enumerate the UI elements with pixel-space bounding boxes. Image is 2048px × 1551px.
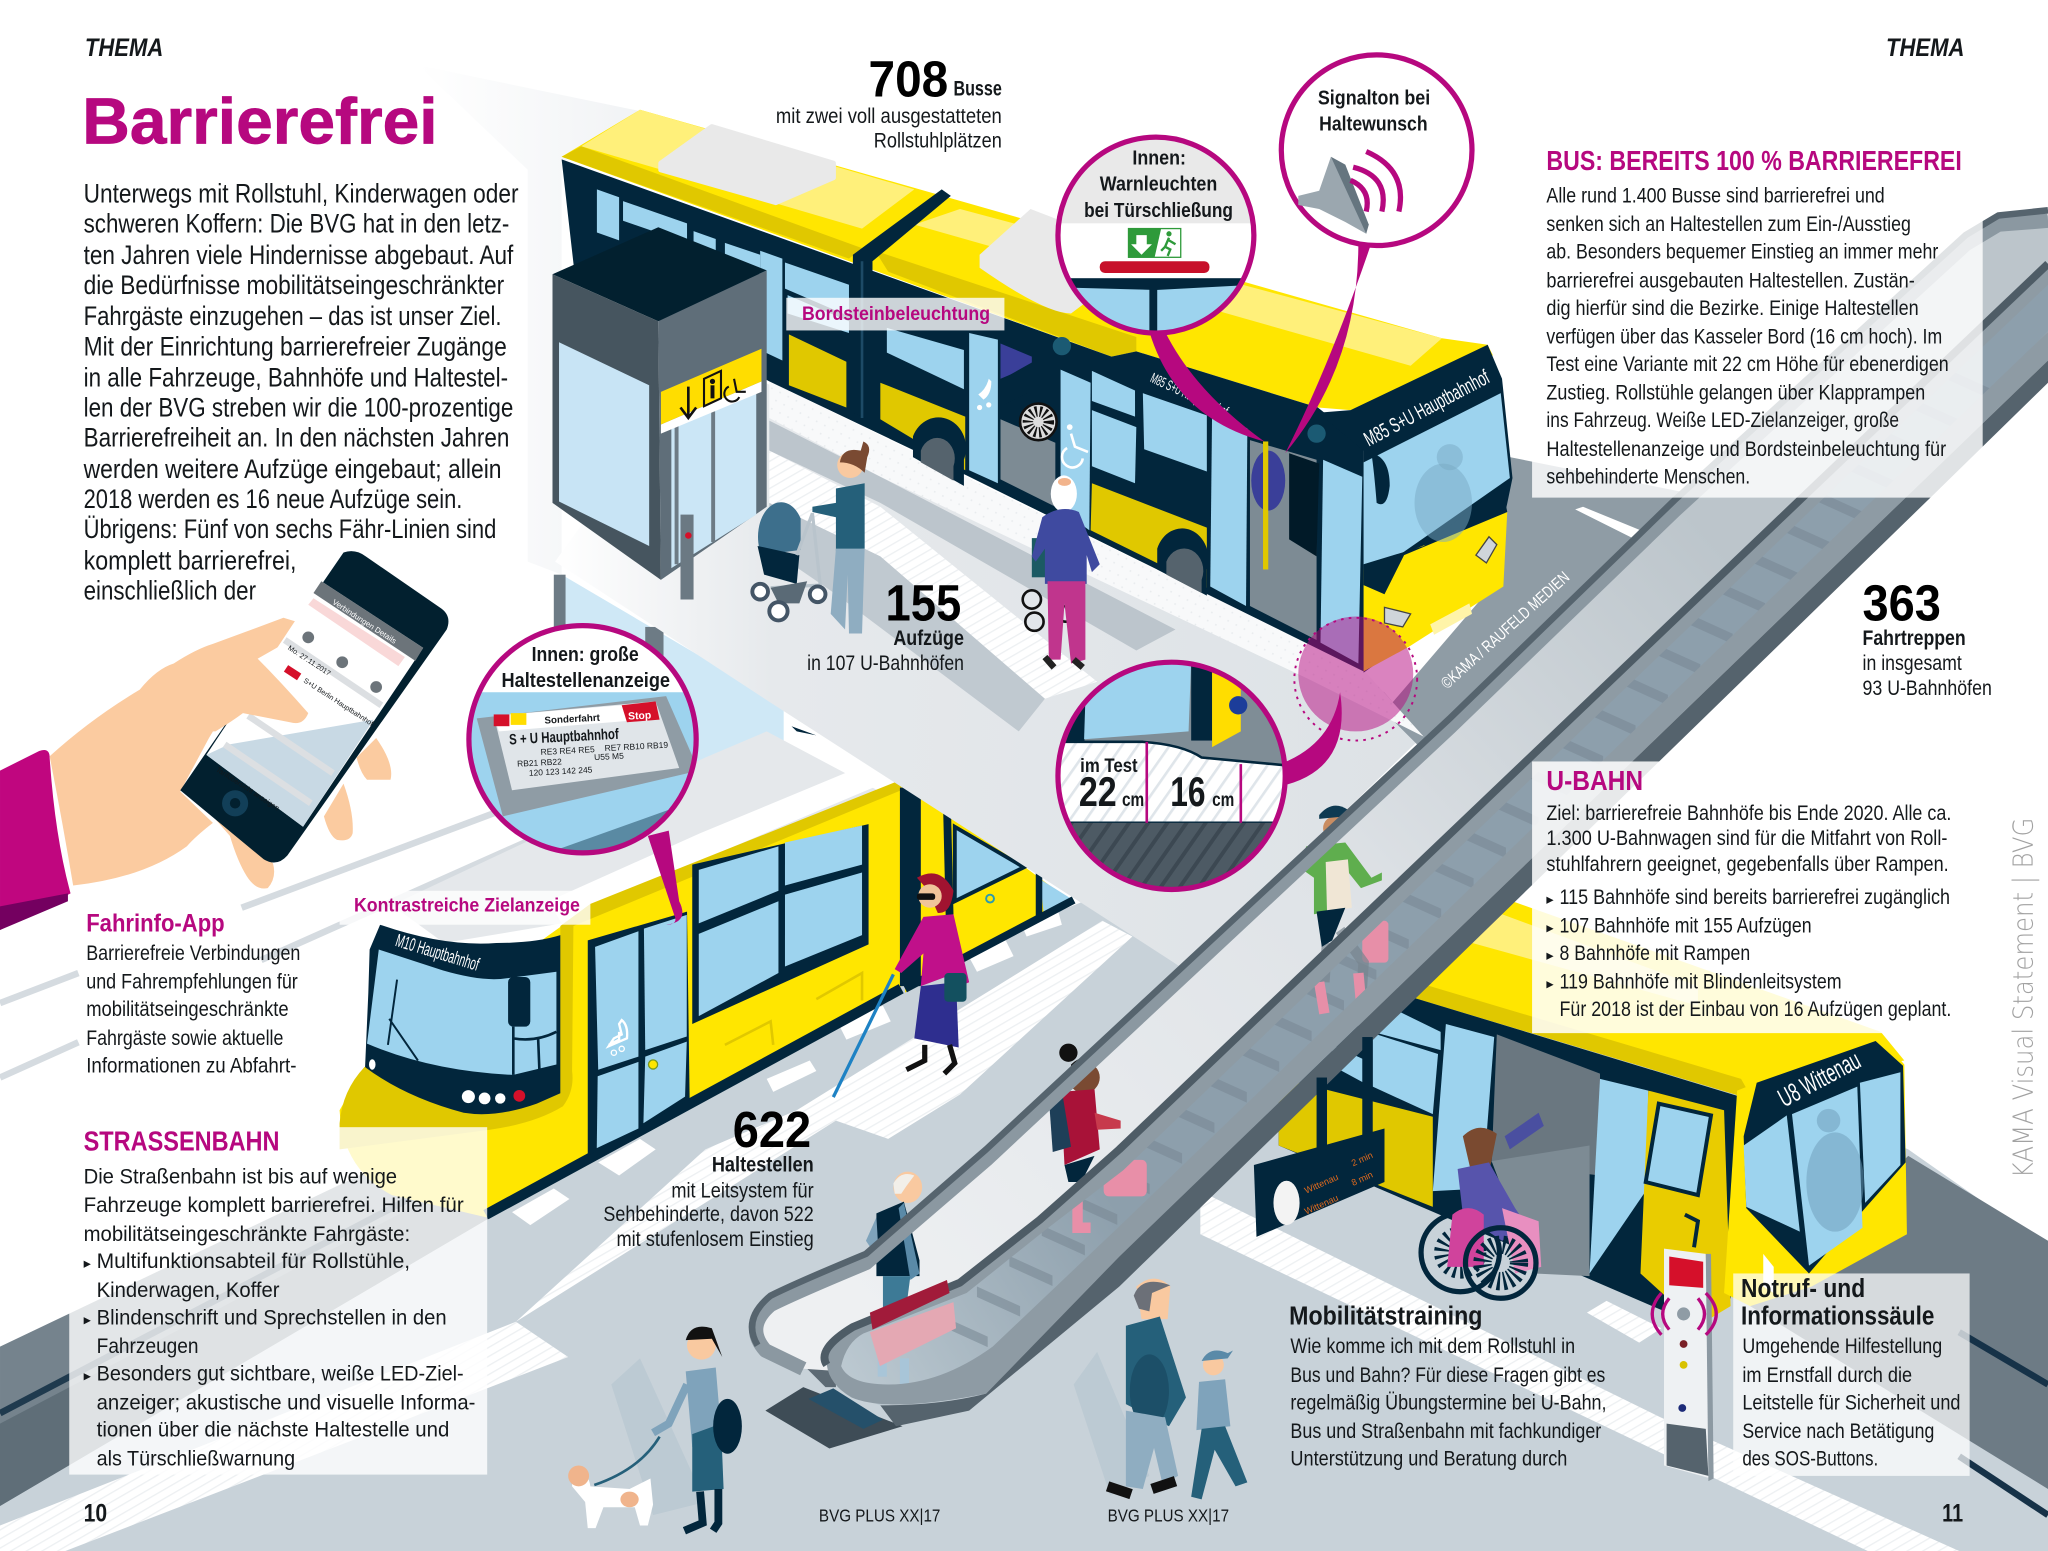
stat: escalators: 363 bbox=[1863, 574, 1941, 631]
callout: warning light bbox=[1058, 137, 1254, 340]
callout: kerb heights: cm bbox=[1122, 789, 1144, 811]
bus articulation bbox=[853, 189, 951, 421]
text block: mobility training bbox=[1289, 1302, 1607, 1470]
text block: mobility training: Unterstützung und Beratung durch bbox=[1290, 1445, 1567, 1470]
escalator left balustrade bbox=[756, 216, 2048, 1371]
intro text: einschließlich der bbox=[84, 576, 256, 606]
ground level surface bbox=[0, 901, 2048, 1551]
elevator tower bbox=[552, 227, 767, 600]
departure board bbox=[1254, 1037, 1384, 1237]
text block: tram: tionen über die nächste Haltestelle und bbox=[97, 1417, 449, 1442]
text block: bus: Alle rund 1.400 Busse sind barrierefrei und bbox=[1546, 182, 1885, 207]
stat: stops: mit Leitsystem für bbox=[671, 1178, 814, 1203]
departure board: Wittenau bbox=[1303, 1193, 1340, 1217]
u-bahn windows bbox=[1332, 1007, 1494, 1191]
intro text: Unterwegs mit Rollstuhl, Kinderwagen oder bbox=[84, 178, 519, 208]
intro text: ten Jahren viele Hindernisse abgebaut. Auf bbox=[84, 240, 514, 270]
text block: bus: ins Fahrzeug. Weiße LED-Zielanzeiger, große bbox=[1546, 407, 1899, 432]
text block: tram: ▸ bbox=[84, 1256, 91, 1272]
intro text: komplett barrierefrei, bbox=[84, 545, 296, 575]
call button post bbox=[680, 515, 694, 600]
text block: bus: BUS: BEREITS 100 % BARRIEREFREI bbox=[1546, 145, 1962, 176]
text block: bus: Haltestellenanzeige und Bordsteinbeleuchtung für bbox=[1546, 436, 1946, 461]
stat: buses bbox=[776, 51, 1002, 153]
bus side bbox=[562, 159, 1364, 671]
intro text: die Bedürfnisse mobilitätseingeschränkter bbox=[84, 270, 504, 300]
u-bahn train bbox=[1279, 900, 1907, 1326]
tram bbox=[340, 782, 1074, 1217]
text block: mobility training: Bus und Straßenbahn mit fachkundiger bbox=[1290, 1418, 1601, 1443]
text block: app: mobilitätseingeschränkte bbox=[86, 996, 289, 1021]
text block: mobility training: regelmäßig Übungstermine bei U-Bahn, bbox=[1290, 1389, 1607, 1414]
departure board: 8 min bbox=[1350, 1170, 1374, 1188]
section tag right: THEMA bbox=[1886, 35, 1964, 62]
departure board: Wittenau bbox=[1303, 1172, 1340, 1196]
road marking bbox=[1575, 507, 1640, 538]
intro text bbox=[83, 178, 519, 606]
phone in hand: Mo. 27.11.2017 bbox=[286, 644, 332, 678]
escalator base plate bbox=[765, 1365, 903, 1448]
text block: u-bahn: 119 Bahnhöfe mit Blindenleitsystem bbox=[1560, 969, 1842, 994]
phone in hand: Verbindungen Details bbox=[331, 598, 398, 646]
text block: app: Fahrgäste sowie aktuelle bbox=[86, 1025, 283, 1050]
callout: warning light: Innen: bbox=[1132, 148, 1186, 170]
callout: kerb heights: 22 bbox=[1079, 768, 1117, 815]
callout: warning light: bei Türschließung bbox=[1084, 200, 1233, 222]
bus front bbox=[1318, 345, 1512, 673]
icon: exit sign bbox=[1128, 229, 1181, 257]
callout: stop display: Haltestellenanzeige bbox=[502, 670, 670, 692]
photo credit: ©KAMA / RAUFELD MEDIEN bbox=[1438, 568, 1573, 693]
bus side destination: M85 S+U Hauptbahnhof bbox=[1148, 371, 1231, 421]
text block: bus: ab. Besonders bequemer Einstieg an immer mehr bbox=[1546, 239, 1938, 264]
u-bahn front: U8 Wittenau bbox=[1773, 1045, 1865, 1113]
elevator glass door bbox=[671, 392, 756, 568]
stat: elevators: 155 bbox=[886, 574, 961, 631]
text block: bus: barrierefrei ausgebauten Haltestellen. Zustän- bbox=[1546, 267, 1915, 292]
wheelchair user bbox=[1421, 1128, 1541, 1298]
text block: tram: Blindenschrift und Sprechstellen in den bbox=[97, 1304, 447, 1329]
thumb bbox=[196, 657, 308, 731]
stat: stops: Haltestellen bbox=[712, 1152, 814, 1177]
text block: mobility training: Mobilitätstraining bbox=[1289, 1302, 1482, 1330]
tram rear car bbox=[901, 782, 1074, 993]
text block: emergency column: Service nach Betätigung bbox=[1742, 1418, 1934, 1443]
stat: stops bbox=[603, 1101, 814, 1251]
callout: kerb heights bbox=[1055, 660, 1288, 893]
callout: stop display: S + U Hauptbahnhof bbox=[509, 726, 620, 748]
phone in hand: Tarifübersicht anzeigen bbox=[214, 766, 281, 812]
callout: stop display: 120 123 142 245 bbox=[529, 764, 593, 778]
text block: u-bahn: ▸ bbox=[1546, 948, 1554, 964]
bus front: M85 S+U Hauptbahnhof bbox=[1360, 366, 1494, 451]
text block: emergency column: Leitstelle für Sicherheit und bbox=[1742, 1389, 1960, 1414]
text block: u-bahn: Ziel: barrierefreie Bahnhöfe bis Ende 2020. Alle ca. bbox=[1546, 800, 1951, 825]
phone in hand: S+U Berlin Hauptbahnhof bbox=[302, 677, 375, 728]
text block: emergency column: Umgehende Hilfestellung bbox=[1742, 1333, 1942, 1358]
callout: signal tone bbox=[1281, 55, 1472, 246]
label: kerb lighting: Bordsteinbeleuchtung bbox=[802, 303, 990, 325]
text block: mobility training: Wie komme ich mit dem Rollstuhl in bbox=[1290, 1333, 1575, 1358]
stat: escalators: 93 U-Bahnhöfen bbox=[1863, 675, 1992, 700]
text block: app: Fahrinfo-App bbox=[86, 910, 225, 937]
text block: u-bahn: stuhlfahrern geeignet, gegebenfalls über Rampen. bbox=[1546, 851, 1949, 876]
text block: bus bbox=[1546, 145, 1962, 488]
section tag left: THEMA bbox=[85, 35, 163, 62]
person shadows bbox=[611, 1352, 1149, 1515]
title: Barrierefrei bbox=[82, 85, 438, 158]
callout: stop display: RE7 RB10 RB19 bbox=[604, 740, 669, 753]
text block: bus: Test eine Variante mit 22 cm Höhe für ebenerdigen bbox=[1546, 351, 1949, 376]
intro text: Übrigens: Fünf von sechs Fähr-Linien sind bbox=[84, 514, 496, 544]
text block: u-bahn: 115 Bahnhöfe sind bereits barrierefrei zugänglich bbox=[1560, 884, 1950, 909]
text block: u-bahn: 107 Bahnhöfe mit 155 Aufzügen bbox=[1560, 913, 1812, 938]
stat: buses: 708 bbox=[869, 51, 948, 108]
vertical credit: KAMA Visual Statement | BVG bbox=[2008, 818, 2039, 1178]
callout: stop display: Stop bbox=[628, 710, 652, 723]
callout: kerb heights: im Test bbox=[1080, 755, 1138, 777]
stat: elevators: in 107 U-Bahnhöfen bbox=[807, 650, 964, 675]
text block: u-bahn: ▸ bbox=[1546, 892, 1554, 908]
text block: app: Barrierefreie Verbindungen bbox=[86, 940, 300, 965]
text block: emergency column bbox=[1741, 1275, 1960, 1470]
tram cab: M10 Hauptbahnhof bbox=[393, 929, 482, 975]
callout: kerb heights: cm bbox=[1212, 789, 1234, 811]
man with beard bbox=[1301, 806, 1388, 1014]
text block: emergency column: im Ernstfall durch die bbox=[1742, 1362, 1912, 1387]
u-bahn front bbox=[1724, 1034, 1907, 1306]
sleeve bbox=[0, 750, 71, 930]
stat: elevators: Aufzüge bbox=[893, 625, 964, 650]
intro text: len der BVG streben wir die 100-prozentige bbox=[84, 393, 513, 423]
callout: stop display: Innen: große bbox=[532, 644, 639, 666]
text block: tram: als Türschließwarnung bbox=[97, 1445, 295, 1470]
tram lower panels bbox=[725, 973, 862, 1045]
father and child bbox=[1108, 1279, 1247, 1499]
callout: kerb heights: 16 bbox=[1170, 768, 1206, 815]
intro text: werden weitere Aufzüge eingebaut; allein bbox=[83, 454, 502, 484]
bus roof bbox=[562, 110, 1493, 410]
text block: bus: sehbehinderte Menschen. bbox=[1546, 463, 1750, 488]
text block: tram: Die Straßenbahn ist bis auf wenige bbox=[84, 1163, 397, 1188]
text block: u-bahn: 8 Bahnhöfe mit Rampen bbox=[1560, 940, 1750, 965]
suitcase handle bbox=[870, 1280, 950, 1330]
phone screen bbox=[206, 581, 423, 827]
label: destination display bbox=[340, 891, 590, 925]
u-bahn cab door bbox=[1640, 1091, 1731, 1326]
tram windows bbox=[692, 824, 869, 1024]
footer left: BVG PLUS XX|17 bbox=[819, 1506, 940, 1526]
glass stair structure bbox=[554, 575, 784, 784]
text block: tram: ▸ bbox=[84, 1312, 91, 1328]
woman with stroller bbox=[752, 441, 869, 633]
text block: bus: Zustieg. Rollstühle gelangen über Klapprampen bbox=[1546, 380, 1925, 405]
tram platform bbox=[392, 731, 914, 943]
senior with rollator bbox=[1023, 475, 1100, 667]
text block: app: und Fahrempfehlungen für bbox=[86, 969, 298, 994]
bus highlight ring bbox=[1294, 616, 1417, 741]
tram doors bbox=[588, 912, 690, 1156]
text block: tram bbox=[84, 1126, 475, 1470]
stat: stops: mit stufenlosem Einstieg bbox=[616, 1226, 814, 1251]
bus windows bbox=[597, 189, 1362, 664]
text block: u-bahn: U-BAHN bbox=[1546, 765, 1643, 796]
text block: tram: Fahrzeuge komplett barrierefrei. Hilfen für bbox=[84, 1192, 464, 1217]
platform lines upper left bbox=[0, 744, 744, 1078]
bus wheels bbox=[913, 417, 1208, 596]
articulated bus bbox=[562, 110, 1512, 673]
faint floor behind headline bbox=[418, 65, 640, 575]
text block: bus: dig hierfür sind die Bezirke. Einige Haltestellen bbox=[1546, 295, 1919, 320]
phone body bbox=[180, 551, 448, 863]
stat: buses: Rollstuhlplätzen bbox=[874, 128, 1002, 153]
stat: escalators: Fahrtreppen bbox=[1863, 625, 1966, 650]
callout: stop display: RE3 RE4 RE5 bbox=[540, 744, 595, 757]
text block: app: Informationen zu Abfahrt- bbox=[86, 1052, 296, 1077]
phone in hand bbox=[0, 551, 448, 930]
u-bahn open door bbox=[1492, 1034, 1648, 1276]
callout: signal tone: Haltewunsch bbox=[1319, 114, 1428, 136]
bus door details bbox=[977, 337, 1326, 640]
callout: warning light: Warnleuchten bbox=[1100, 174, 1217, 196]
footer right: BVG PLUS XX|17 bbox=[1108, 1506, 1229, 1526]
stat: stops: 622 bbox=[733, 1101, 811, 1158]
intro text: 2018 werden es 16 neue Aufzüge sein. bbox=[84, 484, 462, 514]
text block: tram: mobilitätseingeschränkte Fahrgäste: bbox=[84, 1221, 410, 1246]
intro text: Fahrgäste einzugehen – das ist unser Ziel. bbox=[84, 301, 502, 331]
text block: app bbox=[86, 910, 300, 1077]
text block: emergency column: des SOS-Buttons. bbox=[1742, 1445, 1878, 1470]
support edge bbox=[792, 726, 816, 735]
callout: stop display: U55 M5 bbox=[594, 751, 624, 762]
callout tails bbox=[648, 243, 1371, 925]
escalator outer rail bbox=[752, 210, 2048, 1369]
stat: elevators bbox=[807, 574, 964, 675]
escalator bbox=[756, 216, 2048, 1448]
text block: u-bahn: Für 2018 ist der Einbau von 16 Aufzügen geplant. bbox=[1560, 996, 1951, 1021]
track left bbox=[0, 1110, 562, 1506]
icon: speaker bbox=[1298, 152, 1400, 234]
tram cab bbox=[365, 925, 560, 1114]
text block: tram: Fahrzeugen bbox=[97, 1333, 199, 1358]
woman with dog bbox=[568, 1327, 742, 1531]
callout: stop display: Sonderfahrt bbox=[544, 713, 601, 727]
text block: emergency column: Notruf- und bbox=[1741, 1275, 1865, 1303]
elevated slab bbox=[555, 353, 1422, 968]
page number left: 10 bbox=[84, 1501, 107, 1528]
page number right: 11 bbox=[1942, 1501, 1963, 1528]
departure board: 2 min bbox=[1350, 1150, 1374, 1168]
intro text: Mit der Einrichtung barrierefreier Zugänge bbox=[84, 331, 507, 361]
text block: u-bahn: ▸ bbox=[1546, 921, 1554, 937]
bus skirts bbox=[789, 334, 1207, 588]
emergency column bbox=[1652, 1249, 1716, 1481]
text block: bus: verfügen über das Kasseler Bord (16 cm hoch). Im bbox=[1546, 324, 1942, 349]
text block: u-bahn: ▸ bbox=[1546, 977, 1554, 993]
tactile guidance strips bbox=[0, 921, 1959, 1551]
text block: tram: anzeiger; akustische und visuelle Informa- bbox=[97, 1389, 475, 1414]
elevator sign bbox=[661, 349, 761, 434]
stat: stops: Sehbehinderte, davon 522 bbox=[603, 1201, 814, 1226]
blind woman with cane bbox=[833, 873, 969, 1097]
fingers behind phone bbox=[213, 738, 391, 889]
text block: mobility training: Bus und Bahn? Für diese Fragen gibt es bbox=[1290, 1362, 1605, 1387]
man with suitcase bbox=[866, 1172, 956, 1384]
platform edge markers bbox=[512, 910, 1062, 1225]
callout: signal tone: Signalton bei bbox=[1318, 87, 1430, 109]
hand bbox=[50, 618, 313, 886]
escalator handrail ring bbox=[824, 264, 2048, 1426]
text block: tram: ▸ bbox=[84, 1369, 91, 1385]
label: destination display: Kontrastreiche Zielanzeige bbox=[354, 895, 580, 917]
road behind bus bbox=[1384, 457, 1691, 751]
text block: emergency column: Informationssäule bbox=[1741, 1302, 1934, 1330]
text block: tram: Besonders gut sichtbare, weiße LED-Ziel- bbox=[97, 1361, 464, 1386]
text block: bus: senken sich an Haltestellen zum Ein-/Ausstieg bbox=[1546, 211, 1911, 236]
stat: buses: mit zwei voll ausgestatteten bbox=[776, 103, 1002, 128]
woman in red bbox=[1049, 1044, 1147, 1228]
bus platform strips bbox=[769, 381, 1424, 737]
step ribs bbox=[945, 370, 1992, 1347]
stat: buses: Busse bbox=[953, 77, 1002, 100]
text block: u-bahn bbox=[1546, 765, 1951, 1021]
track right bbox=[1750, 1156, 2048, 1515]
text block: tram: Kinderwagen, Koffer bbox=[97, 1277, 280, 1302]
intro text: schweren Koffern: Die BVG hat in den letz- bbox=[84, 208, 509, 238]
stat: escalators bbox=[1863, 574, 1992, 700]
text block: tram: Multifunktionsabteil für Rollstühle, bbox=[97, 1248, 410, 1273]
text block: u-bahn: 1.300 U-Bahnwagen sind für die Mitfahrt von Roll- bbox=[1546, 825, 1947, 850]
intro text: in alle Fahrzeuge, Bahnhöfe und Haltestel- bbox=[84, 363, 508, 393]
callout: stop display: RB21 RB22 bbox=[517, 756, 562, 769]
text block: tram: STRASSENBAHN bbox=[84, 1126, 280, 1157]
callout: stop display bbox=[468, 626, 705, 862]
tram body bbox=[340, 782, 901, 1217]
escalator steps bbox=[827, 264, 2048, 1405]
label: kerb lighting bbox=[786, 298, 1004, 330]
intro text: Barrierefreiheit an. In den nächsten Jahren bbox=[84, 423, 509, 453]
stat: escalators: in insgesamt bbox=[1863, 650, 1962, 675]
